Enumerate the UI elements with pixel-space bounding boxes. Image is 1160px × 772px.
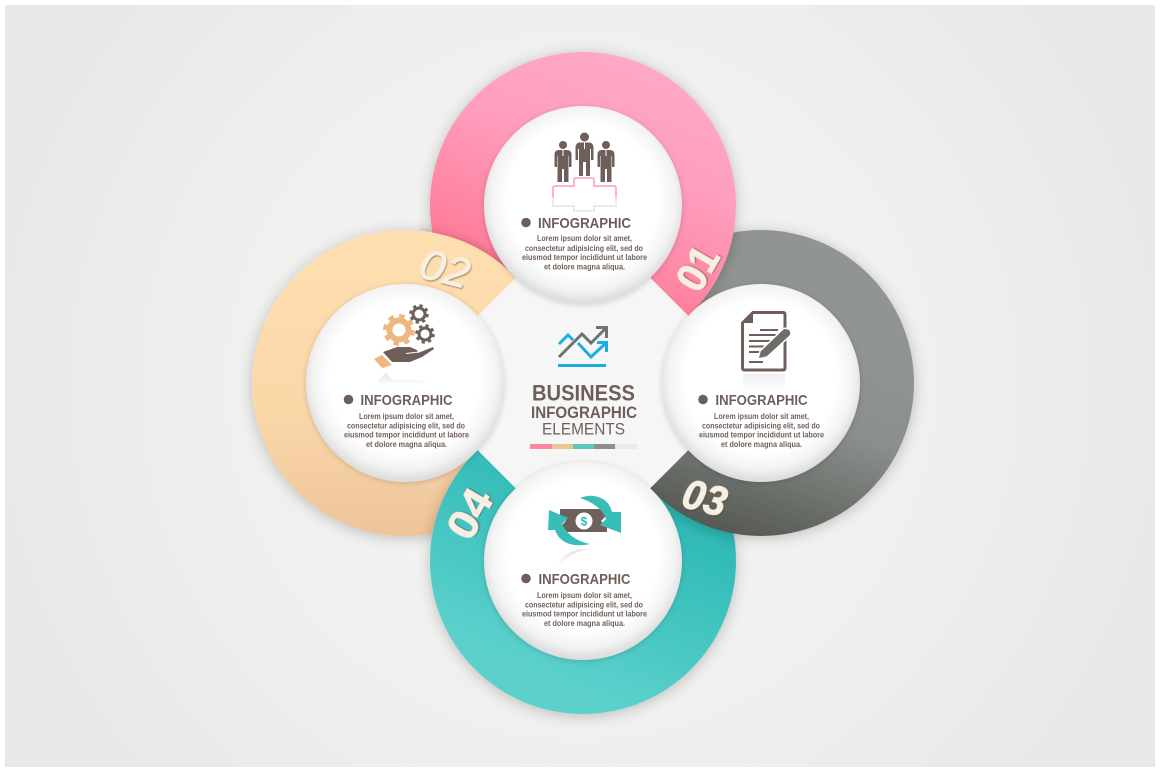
bullet xyxy=(344,395,353,404)
panel: circle left xyxy=(306,284,504,482)
heading: INFOGRAPHIC xyxy=(360,392,453,409)
body text: et dolore magna aliqua. xyxy=(366,440,447,449)
panel: circle right xyxy=(662,284,860,482)
body text xyxy=(344,412,469,449)
heading: INFOGRAPHIC xyxy=(538,215,631,232)
icon: document with pen xyxy=(742,312,791,392)
icon: rising chart arrows xyxy=(558,328,606,366)
body text: consectetur adipisicing elit, sed do xyxy=(525,244,643,253)
panel: circle bottom xyxy=(484,462,682,660)
icon: money exchange xyxy=(548,496,621,565)
number 03: 03 xyxy=(678,469,732,526)
number 04: 04 xyxy=(437,480,503,547)
number 01: 01 xyxy=(666,237,729,299)
icon: people on podium xyxy=(553,132,616,211)
heading: INFOGRAPHIC xyxy=(538,571,631,588)
body text: et dolore magna aliqua. xyxy=(721,440,802,449)
ring: 02 orange overlap above pink xyxy=(420,227,516,316)
icon: money exchange: $ xyxy=(581,514,588,528)
ring: 04 teal xyxy=(430,408,736,714)
body text xyxy=(522,591,647,628)
center panel xyxy=(410,210,756,556)
body text: Lorem ipsum dolor sit amet, xyxy=(537,234,632,243)
bullet xyxy=(521,574,531,583)
panel: circle top xyxy=(484,106,682,304)
ring: 03 grey xyxy=(608,230,914,536)
number 02: 02 xyxy=(415,240,475,297)
heading: INFOGRAPHIC xyxy=(716,392,808,409)
body text: consectetur adipisicing elit, sed do xyxy=(347,422,465,430)
title: INFOGRAPHIC xyxy=(531,403,637,422)
body text: consectetur adipisicing elit, sed do xyxy=(525,600,643,610)
body text: eiusmod tempor incididunt ut labore xyxy=(522,253,647,262)
body text: Lorem ipsum dolor sit amet, xyxy=(359,412,454,421)
bullet xyxy=(521,218,531,227)
body text: eiusmod tempor incididunt ut labore xyxy=(522,610,647,618)
title: BUSINESS xyxy=(532,380,635,406)
title: ELEMENTS xyxy=(542,420,625,438)
body text: Lorem ipsum dolor sit amet, xyxy=(537,591,632,600)
body text: et dolore magna aliqua. xyxy=(544,619,625,628)
body text xyxy=(699,412,824,449)
body text: consectetur adipisicing elit, sed do xyxy=(702,422,820,430)
ring: 01 pink xyxy=(430,52,736,358)
body text: et dolore magna aliqua. xyxy=(544,262,625,272)
ring: 02 orange xyxy=(252,230,558,536)
icon: hand with gears xyxy=(374,306,434,385)
body text: eiusmod tempor incididunt ut labore xyxy=(699,430,824,440)
body text: eiusmod tempor incididunt ut labore xyxy=(344,430,469,440)
title xyxy=(531,380,637,438)
bullet xyxy=(698,395,708,404)
colour bar xyxy=(530,444,637,449)
body text xyxy=(522,234,647,272)
body text: Lorem ipsum dolor sit amet, xyxy=(714,412,809,421)
